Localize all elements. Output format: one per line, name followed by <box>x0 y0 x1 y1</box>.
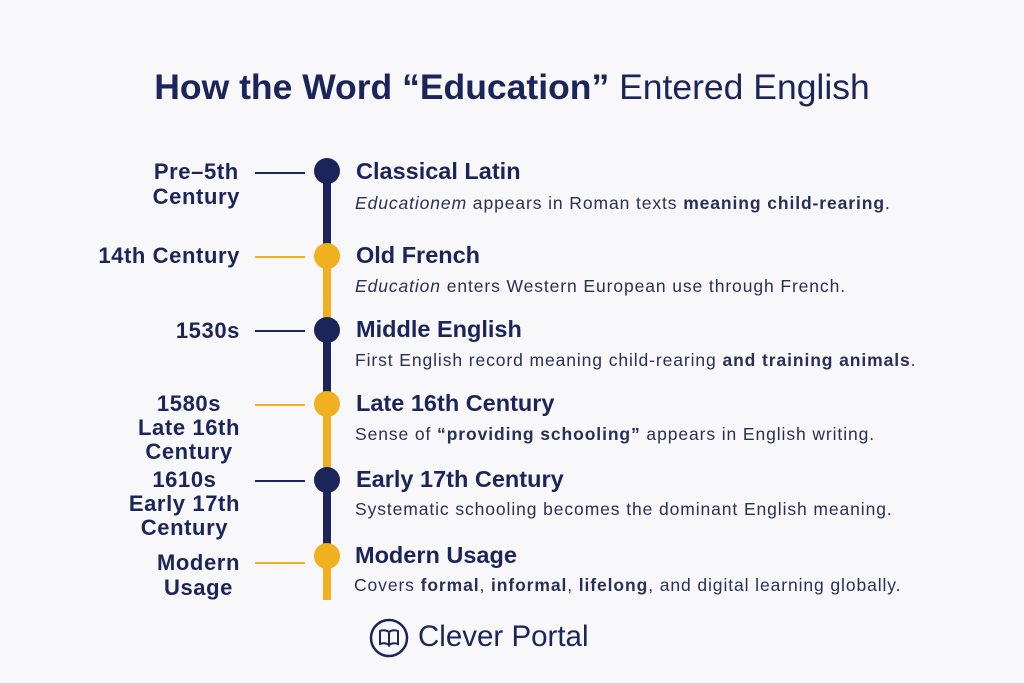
date labels: Late 16th <box>138 415 240 440</box>
event texts <box>354 158 916 595</box>
event texts: Modern Usage <box>355 542 517 568</box>
date labels: Modern <box>157 550 240 575</box>
logo <box>370 618 589 658</box>
date labels: 1580s <box>157 391 221 416</box>
date labels: Century <box>141 515 228 540</box>
date labels: Early 17th <box>129 491 240 516</box>
event texts: Education enters Western European use through French. <box>355 276 846 296</box>
date labels: Pre–5th <box>154 159 239 184</box>
event texts: Late 16th Century <box>356 390 554 416</box>
date labels: Century <box>153 184 240 209</box>
icon: book <box>370 618 408 658</box>
date labels: 14th Century <box>98 243 240 268</box>
logo: Clever Portal <box>418 620 589 653</box>
date labels: 1610s <box>152 467 216 492</box>
event texts: Systematic schooling becomes the dominant English meaning. <box>355 499 893 519</box>
date labels <box>98 159 240 600</box>
event texts: First English record meaning child-rearing and training animals. <box>355 350 916 370</box>
event texts: Early 17th Century <box>356 466 564 492</box>
event texts: Old French <box>356 242 480 268</box>
date labels: Usage <box>164 575 233 600</box>
title: How the Word “Education” Entered English <box>154 67 870 107</box>
event texts: Covers formal, informal, lifelong, and digital learning globally. <box>354 575 901 595</box>
event texts: Middle English <box>356 316 522 342</box>
date labels: 1530s <box>176 318 240 343</box>
event texts: Sense of “providing schooling” appears in English writing. <box>355 424 875 444</box>
date labels: Century <box>145 439 233 464</box>
event texts: Classical Latin <box>356 158 521 184</box>
event texts: Educationem appears in Roman texts meaning child-rearing. <box>355 193 891 213</box>
